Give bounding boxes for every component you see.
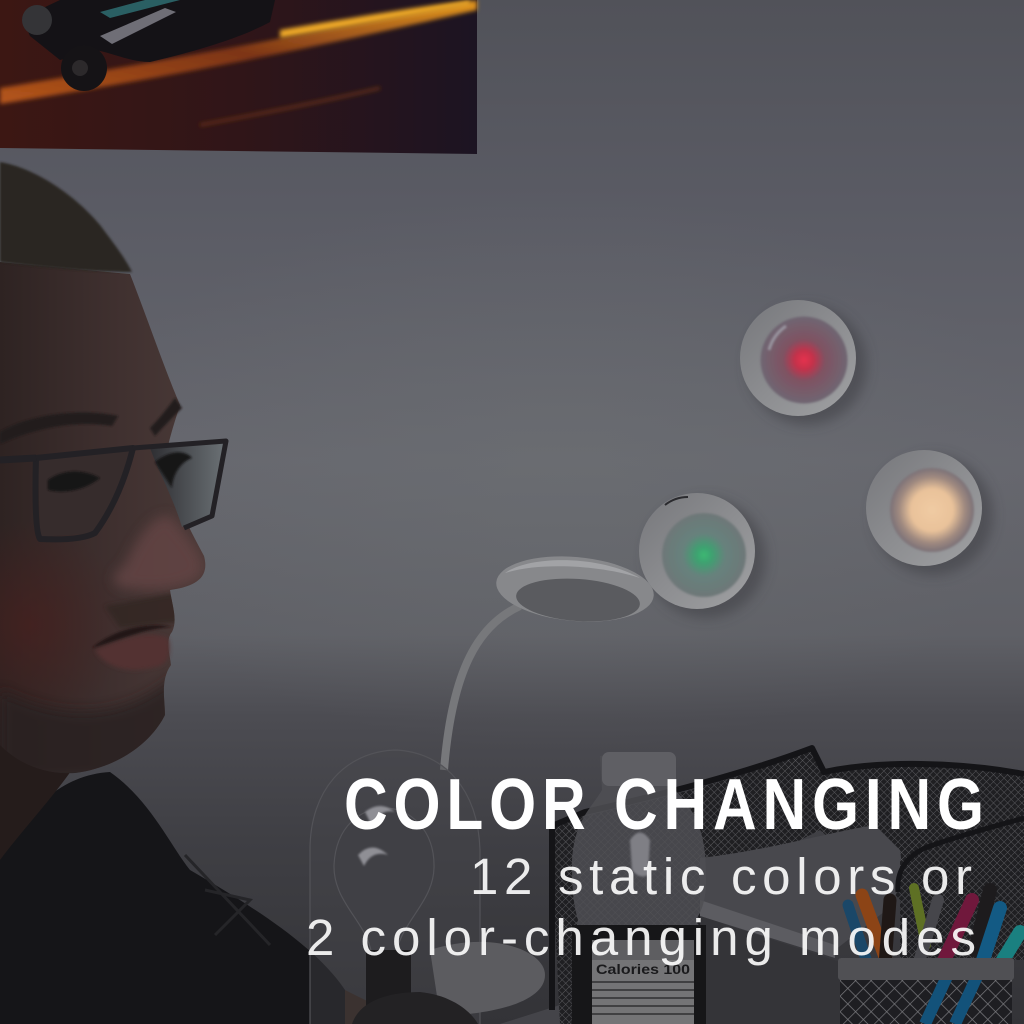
shirt graphic: [185, 855, 270, 945]
pen cup: [838, 888, 1020, 1024]
eyebrows: [0, 398, 182, 444]
desk organizer: [552, 748, 1024, 1024]
subheading line 2: 2 color-changing modes: [306, 909, 976, 966]
right lens: [150, 442, 224, 527]
arm: [345, 990, 412, 1024]
poster vehicle: [22, 0, 275, 91]
light: red: [740, 300, 867, 425]
caption: [306, 765, 984, 966]
subheading line 1: 12 static colors or: [470, 848, 972, 905]
glasses frame: [0, 441, 226, 539]
poster: [0, 0, 477, 154]
nutrition label: Calories 100: [596, 961, 690, 977]
pens: [848, 888, 1020, 1000]
nutrition label: [592, 940, 694, 1024]
person: [0, 161, 366, 1024]
face shading: [0, 516, 203, 780]
shirt: [0, 772, 345, 1024]
hair: [0, 162, 132, 272]
desk lamp: [444, 550, 656, 770]
water bottle: [572, 752, 706, 1024]
left lens: [38, 450, 133, 537]
neck: [0, 740, 90, 860]
nose highlight: [114, 516, 203, 590]
light: amber: [866, 450, 993, 575]
mustache shadow: [108, 593, 174, 628]
light: green: [639, 493, 766, 618]
eyes: [48, 452, 192, 492]
lamp base: [430, 942, 545, 1016]
heading: COLOR CHANGING: [344, 765, 984, 845]
jaw shade: [4, 680, 165, 773]
face: [0, 262, 205, 773]
lips: [95, 635, 169, 670]
cheek shadow: [0, 574, 62, 676]
bulb: [334, 808, 434, 960]
paper tray: [700, 825, 901, 950]
bell jar with bulb: [310, 750, 545, 1024]
desk surface: [500, 1005, 840, 1024]
